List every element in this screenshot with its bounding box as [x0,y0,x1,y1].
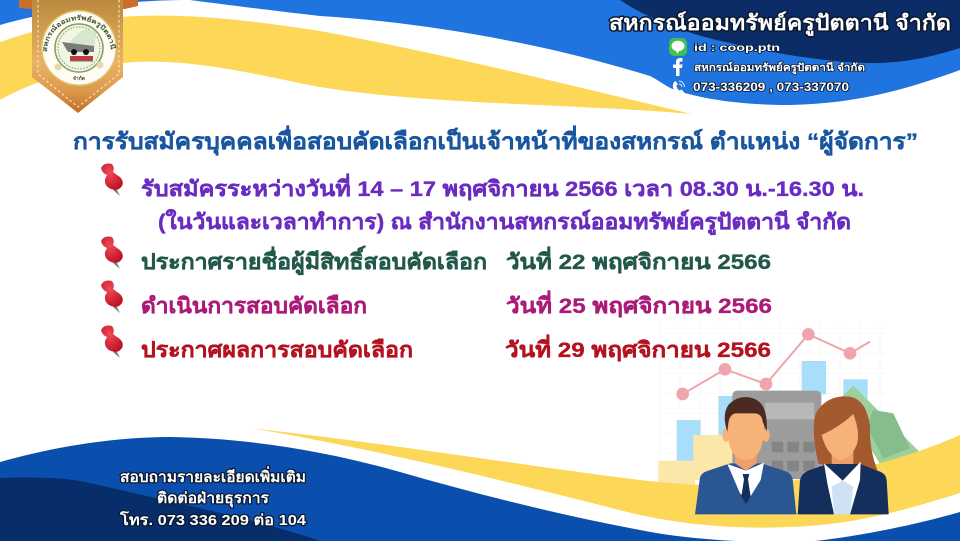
ribbon tabs [19,0,138,9]
bottom dark navy wave [0,478,320,541]
contact block: สอบถามรายละเอียดเพิ่มเติม [120,466,306,486]
chart illustration background [658,323,919,517]
contact block [119,466,307,529]
main heading: การรับสมัครบุคคลเพื่อสอบคัดเลือกเป็นเจ้าหน้าที่ของสหกรณ์ ตำแหน่ง “ผู้จัดการ” [73,125,918,156]
bottom blue wave [0,437,735,541]
logo seal [41,10,117,86]
bars [677,361,868,462]
icon: phone [673,81,685,95]
bottom right blue corner [815,512,960,541]
ribbon body [32,0,123,113]
pin 3 [101,280,123,313]
chart grid [660,323,887,517]
seal text: สหกรณ์ออมทรัพย์ครูปัตตานี [43,14,116,52]
contact block: โทร. 073 336 209 ต่อ 104 [119,510,307,529]
top dark navy wave [620,0,960,63]
logo seal: จำกัด [73,75,85,82]
line id: id : coop.ptn [694,42,780,54]
results label: ประกาศผลการสอบคัดเลือก [141,338,413,362]
pin 2 [101,236,123,269]
contact block: ติดต่อฝ่ายธุรการ [157,489,270,508]
woman [798,396,889,514]
coins [658,435,735,484]
pin 1 [101,164,123,196]
announcement label: ประกาศรายชื่อผู้มีสิทธิ์สอบคัดเลือก [141,245,487,276]
man [695,397,796,514]
exam date: วันที่ 25 พฤศจิกายน 2566 [506,290,772,318]
application line 2: (ในวันและเวลาทำการ) ณ สำนักงานสหกรณ์ออมทรัพย์ครูปัตตานี จำกัด [158,208,851,236]
top blue wave [0,0,960,105]
exam label: ดำเนินการสอบคัดเลือก [141,294,367,318]
icon: line [669,38,687,56]
calculator [732,391,821,479]
announcement date: วันที่ 22 พฤศจิกายน 2566 [506,246,771,274]
top yellow wave [0,16,692,114]
header title: สหกรณ์ออมทรัพย์ครูปัตตานี จำกัด [609,11,951,37]
application line 1: รับสมัครระหว่างวันที่ 14 – 17 พฤศจิกายน 2566 เวลา 08.30 น.-16.30 น. [141,173,864,201]
ribbon badge [19,0,138,113]
pin 4 [101,326,123,358]
facebook name: สหกรณ์ออมทรัพย์ครูปัตตานี จำกัด [694,61,865,75]
banknotes [840,386,919,464]
icon: facebook [673,58,682,76]
bottom yellow wave [250,428,960,528]
line chart [676,328,870,400]
results date: วันที่ 29 พฤศจิกายน 2566 [505,334,771,362]
phone numbers: 073-336209 , 073-337070 [693,82,849,94]
people illustration [695,396,889,514]
